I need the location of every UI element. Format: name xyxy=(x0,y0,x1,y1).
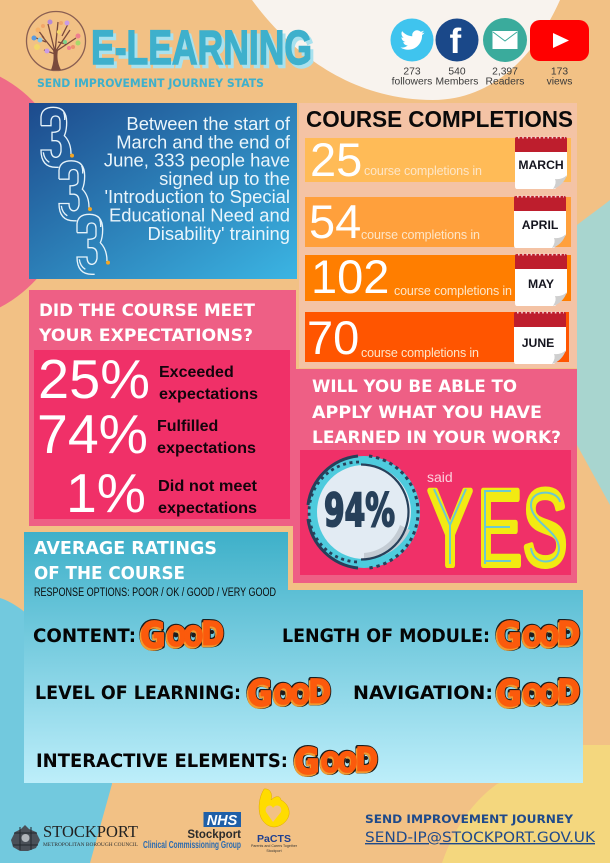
stat: 1% did not meet: expectations xyxy=(158,500,257,517)
icon: mail xyxy=(483,18,527,62)
badge: good: O xyxy=(540,621,559,652)
stat: 74% fulfilled: Fulfilled xyxy=(157,418,218,435)
badge: good: O xyxy=(289,681,309,712)
heading: average ratings: OF THE COURSE xyxy=(34,563,185,584)
badge: good: O xyxy=(273,679,293,710)
logo: stockport council xyxy=(11,822,138,851)
badge: good: O xyxy=(274,679,293,710)
badge: good: O xyxy=(523,679,542,710)
badge: good: O xyxy=(290,679,310,710)
badge: good: G xyxy=(247,673,272,715)
icon: youtube xyxy=(530,20,589,61)
badge: good: G xyxy=(293,742,318,784)
badge: good: G xyxy=(247,672,272,714)
badge: good: D xyxy=(309,673,331,711)
row: june: course completions in xyxy=(361,346,479,360)
row: june: 70 xyxy=(307,311,359,364)
heading: apply: APPLY WHAT YOU HAVE xyxy=(312,403,542,423)
badge: good: O xyxy=(521,681,541,712)
badge: good: O xyxy=(184,621,203,652)
gauge: 94%: 94% xyxy=(324,484,395,537)
badge: good xyxy=(495,672,580,716)
sign up text: Educational Need and xyxy=(109,204,290,226)
badge: good: D xyxy=(558,615,580,653)
stat: 25% exceeded: expectations xyxy=(159,386,258,403)
social labels: 540 xyxy=(448,66,466,78)
sign up text xyxy=(104,113,291,244)
badge: good: D xyxy=(200,617,223,655)
contact details xyxy=(365,812,596,846)
logo: pacts: PaCTS xyxy=(257,833,291,845)
social labels: views xyxy=(547,76,572,88)
row: april xyxy=(305,195,571,248)
yes: YES xyxy=(428,469,567,589)
badge: good: G xyxy=(496,614,521,656)
badge: good: G xyxy=(495,616,520,658)
stat: 25% exceeded xyxy=(38,348,258,410)
badge: good: O xyxy=(337,747,357,778)
sign up text: 'Introduction to Special xyxy=(104,186,290,207)
badge: good: O xyxy=(538,623,558,654)
row: may: course completions in xyxy=(394,284,512,298)
sign up text: June, 333 people have xyxy=(104,150,290,171)
badge: good: O xyxy=(291,679,310,710)
response options: RESPONSE OPTIONS: POOR / OK / GOOD / VERY GOOD xyxy=(34,585,276,599)
gauge: 94% xyxy=(308,456,420,568)
badge: good: D xyxy=(556,675,579,713)
badge: good: D xyxy=(556,617,579,655)
badge: good: G xyxy=(496,672,521,714)
badge: good: D xyxy=(201,616,224,654)
badge: good: G xyxy=(139,616,164,658)
badge: good xyxy=(139,614,224,658)
badge: good: D xyxy=(557,674,580,712)
heading: apply xyxy=(312,377,561,448)
badge: good xyxy=(293,740,378,784)
heading: course completions: COURSE COMPLETIONS xyxy=(306,106,573,132)
badge: good: O xyxy=(336,749,356,780)
panel: 333 sign ups xyxy=(29,103,297,279)
row: june: JUNE xyxy=(522,336,554,350)
rating: level of learning: LEVEL OF LEARNING: xyxy=(35,682,241,704)
heading: expectations: YOUR EXPECTATIONS? xyxy=(38,326,253,346)
stat: 1% did not meet xyxy=(66,462,258,524)
sign up text: Between the start of xyxy=(126,113,291,134)
rating: content: CONTENT: xyxy=(33,625,136,647)
social labels: 173 xyxy=(551,66,568,78)
badge: good: D xyxy=(354,743,377,781)
row: may: MAY xyxy=(528,277,554,291)
badge: good: G xyxy=(294,740,319,782)
logo: pacts: Parents and Carers Together xyxy=(251,844,298,848)
badge: good: O xyxy=(166,621,186,652)
stat: 25% exceeded: 25% xyxy=(38,348,150,410)
header logo: tree in a circle xyxy=(26,12,86,70)
panel: course completions xyxy=(299,103,577,368)
contact details: SEND IMPROVEMENT JOURNEY xyxy=(365,812,574,826)
badge: good: G xyxy=(246,674,271,716)
badge: good: O xyxy=(522,621,542,652)
badge: good: O xyxy=(540,679,559,710)
badge: good xyxy=(495,614,580,658)
rating: navigation xyxy=(353,672,580,716)
stat: 74% fulfilled: expectations xyxy=(157,440,256,457)
heading: apply: WILL YOU BE ABLE TO xyxy=(312,377,517,397)
logo: nhs stockport ccg: Clinical Commissioning Group xyxy=(143,840,241,851)
badge: good: O xyxy=(338,747,357,778)
row: june xyxy=(305,311,569,364)
badge: good: O xyxy=(522,679,542,710)
rating: level of learning xyxy=(35,672,331,716)
heading: apply: LEARNED IN YOUR WORK? xyxy=(312,428,561,448)
social labels: followers xyxy=(392,76,432,88)
badge: good: O xyxy=(182,623,202,654)
panel: will you be able to apply (backing) xyxy=(293,369,577,583)
contact details: SEND-IP@STOCKPORT.GOV.UK xyxy=(365,830,596,846)
badge: good: G xyxy=(294,741,319,783)
badge: good: G xyxy=(495,674,520,716)
row: may xyxy=(305,250,571,306)
stat: 1% did not meet: Did not meet xyxy=(158,478,258,495)
badge: good: D xyxy=(307,675,330,713)
stat: 74% fulfilled xyxy=(37,403,256,465)
social labels xyxy=(392,66,572,88)
rating: content xyxy=(33,614,224,658)
heading: average ratings xyxy=(34,538,217,584)
rating: length of module xyxy=(282,614,580,658)
badge: good: D xyxy=(308,674,331,712)
icon: three outlined 3s xyxy=(41,107,110,274)
badge: good: O xyxy=(167,621,186,652)
heading: average ratings: AVERAGE RATINGS xyxy=(34,538,217,559)
badge: good: G xyxy=(140,614,165,656)
logo: nhs stockport ccg: NHS xyxy=(207,813,238,829)
social labels: Members xyxy=(436,76,478,88)
badge: good: D xyxy=(356,741,378,779)
sign up text: Disability' training xyxy=(147,223,290,244)
stat: 1% did not meet: 1% xyxy=(66,462,146,524)
row: march: MARCH xyxy=(518,158,564,172)
badge: good: O xyxy=(539,679,559,710)
logo: stockport council: METROPOLITAN BOROUGH COUNCIL xyxy=(43,843,138,848)
social labels: 273 xyxy=(403,66,421,78)
badge: good: D xyxy=(202,615,224,653)
sign up text: March and the end of xyxy=(116,131,291,152)
row: march xyxy=(305,133,571,189)
badge: good: O xyxy=(320,747,340,778)
logo: pacts: Stockport xyxy=(266,849,282,853)
panel: did the course meet your expectations xyxy=(29,290,296,526)
rating: length of module: LENGTH OF MODULE: xyxy=(282,625,490,647)
badge: good: G xyxy=(140,615,165,657)
title: E-LEARNING xyxy=(94,26,315,78)
social stats xyxy=(390,18,589,88)
sign up text: signed up to the xyxy=(159,168,290,189)
badge: good: O xyxy=(272,681,292,712)
heading: expectations: DID THE COURSE MEET xyxy=(39,301,255,321)
badge: good: D xyxy=(557,616,580,654)
icon: facebook xyxy=(436,18,478,62)
stat: 25% exceeded: Exceeded xyxy=(159,364,234,381)
badge: good: D xyxy=(558,673,580,711)
said: said xyxy=(427,469,453,485)
logo: stockport council: STOCKPORT xyxy=(43,822,138,841)
row: april: course completions in xyxy=(361,228,480,242)
badge: good: D xyxy=(355,742,378,780)
social labels: 2,397 xyxy=(492,66,518,78)
icon: facebook: f xyxy=(450,22,462,61)
icon: twitter xyxy=(390,18,434,62)
subtitle: SEND IMPROVEMENT JOURNEY STATS xyxy=(37,76,264,90)
row: march: 25 xyxy=(310,133,362,186)
panel: average ratings xyxy=(24,532,583,784)
row: april: 54 xyxy=(309,195,361,248)
row: april: APRIL xyxy=(522,218,559,232)
row: march: course completions in xyxy=(364,164,482,178)
logo: pacts xyxy=(251,789,298,853)
badge: good: O xyxy=(165,623,185,654)
badge: good: G xyxy=(496,615,521,657)
heading: expectations xyxy=(38,301,255,346)
title: E-LEARNING xyxy=(91,22,312,75)
badge: good: O xyxy=(319,749,339,780)
badge: good xyxy=(246,672,331,716)
badge: good: O xyxy=(183,621,203,652)
logo: nhs stockport ccg xyxy=(143,812,241,851)
rating: navigation: NAVIGATION: xyxy=(353,682,493,704)
badge: good: O xyxy=(521,623,541,654)
rating: interactive elements xyxy=(36,740,378,784)
badge: good: O xyxy=(523,621,542,652)
badge: good: O xyxy=(321,747,340,778)
badge: good: O xyxy=(538,681,558,712)
badge: good: G xyxy=(496,673,521,715)
badge: good: O xyxy=(539,621,559,652)
row: may: 102 xyxy=(311,250,389,303)
panel: apply learning content xyxy=(300,377,571,589)
logo: nhs stockport ccg: Stockport xyxy=(187,829,241,841)
social labels: Readers xyxy=(486,76,524,88)
rating: interactive elements: INTERACTIVE ELEMENTS: xyxy=(36,750,288,772)
stat: 74% fulfilled: 74% xyxy=(37,403,148,465)
